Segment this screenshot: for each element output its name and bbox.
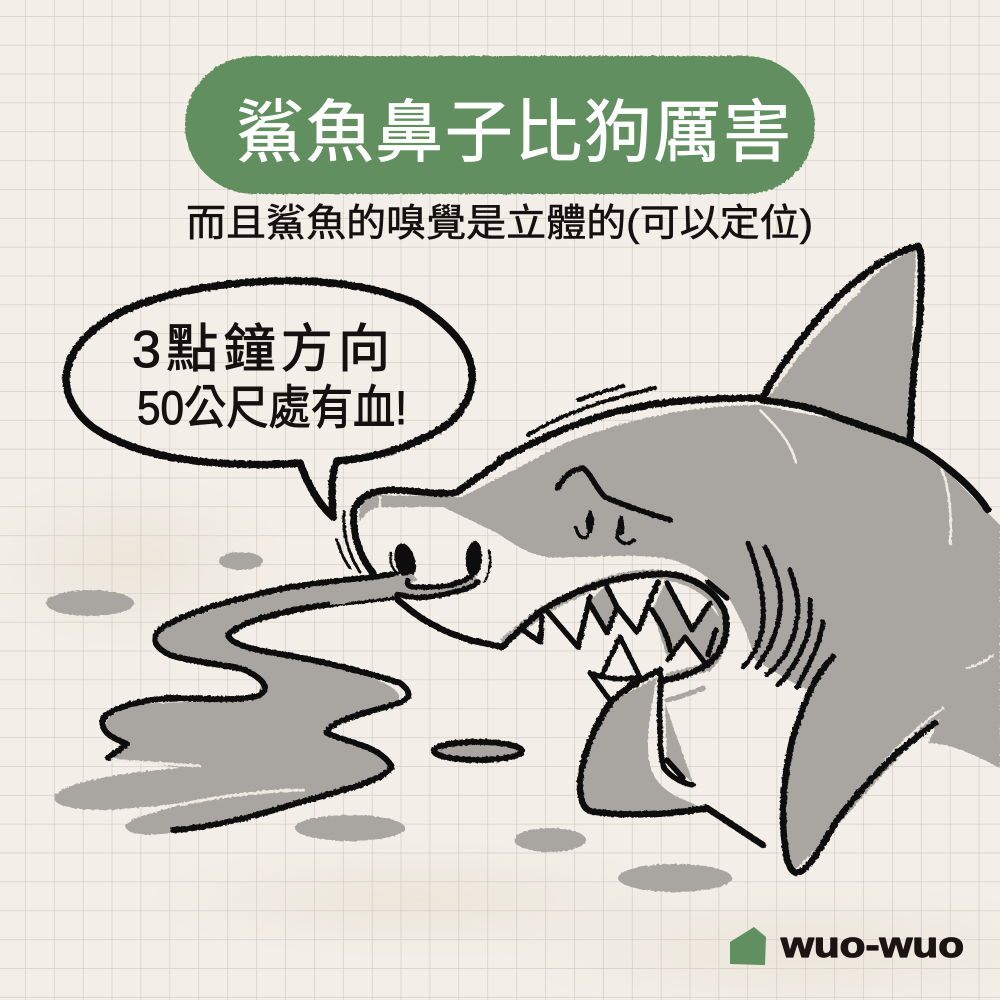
white highlights on body — [380, 410, 993, 858]
gill lines — [743, 543, 823, 687]
motion lines by snout — [337, 512, 360, 572]
blood puddle — [54, 574, 412, 835]
logo wordmark: wuo-wuo — [780, 924, 964, 965]
gray teeth — [590, 583, 725, 665]
head top outline — [354, 462, 500, 573]
eyes — [576, 512, 634, 543]
logo — [730, 924, 964, 965]
lower jaw fill — [580, 677, 700, 815]
shark head and body fill — [359, 405, 1000, 872]
icon: green house — [730, 927, 766, 965]
mouth gums — [503, 574, 725, 678]
lower teeth — [590, 630, 716, 703]
title text: 鯊魚鼻子比狗厲害 — [236, 95, 791, 171]
puddle drops — [46, 552, 732, 892]
green pill — [185, 56, 815, 194]
dorsal fin fill — [768, 250, 916, 440]
nostrils — [391, 541, 419, 581]
puddle lower outline — [173, 597, 408, 830]
motion lines above head — [528, 386, 655, 435]
blood stream into nostrils — [330, 572, 478, 605]
lower snout outline — [398, 600, 502, 647]
eyebrow — [557, 468, 670, 520]
white highlight in puddle — [105, 760, 305, 805]
speech bubble — [66, 281, 472, 517]
puddle upper outline — [102, 574, 397, 758]
subtitle: 而且鯊魚的嗅覺是立體的(可以定位) — [186, 203, 813, 245]
small outlined puddle — [434, 742, 522, 760]
title banner — [185, 56, 815, 194]
pectoral fin outline — [783, 657, 935, 873]
back and dorsal fin outline — [500, 246, 988, 510]
upper teeth — [523, 582, 710, 650]
bubble text line 2: 50公尺處有血! — [137, 381, 407, 434]
bubble outline — [66, 281, 472, 517]
shark — [330, 246, 1000, 873]
puddle fill — [54, 577, 412, 835]
bubble text line 1: 3點鐘方向 — [132, 321, 390, 379]
mouth outline — [502, 574, 726, 680]
lower jaw outline — [580, 670, 763, 845]
